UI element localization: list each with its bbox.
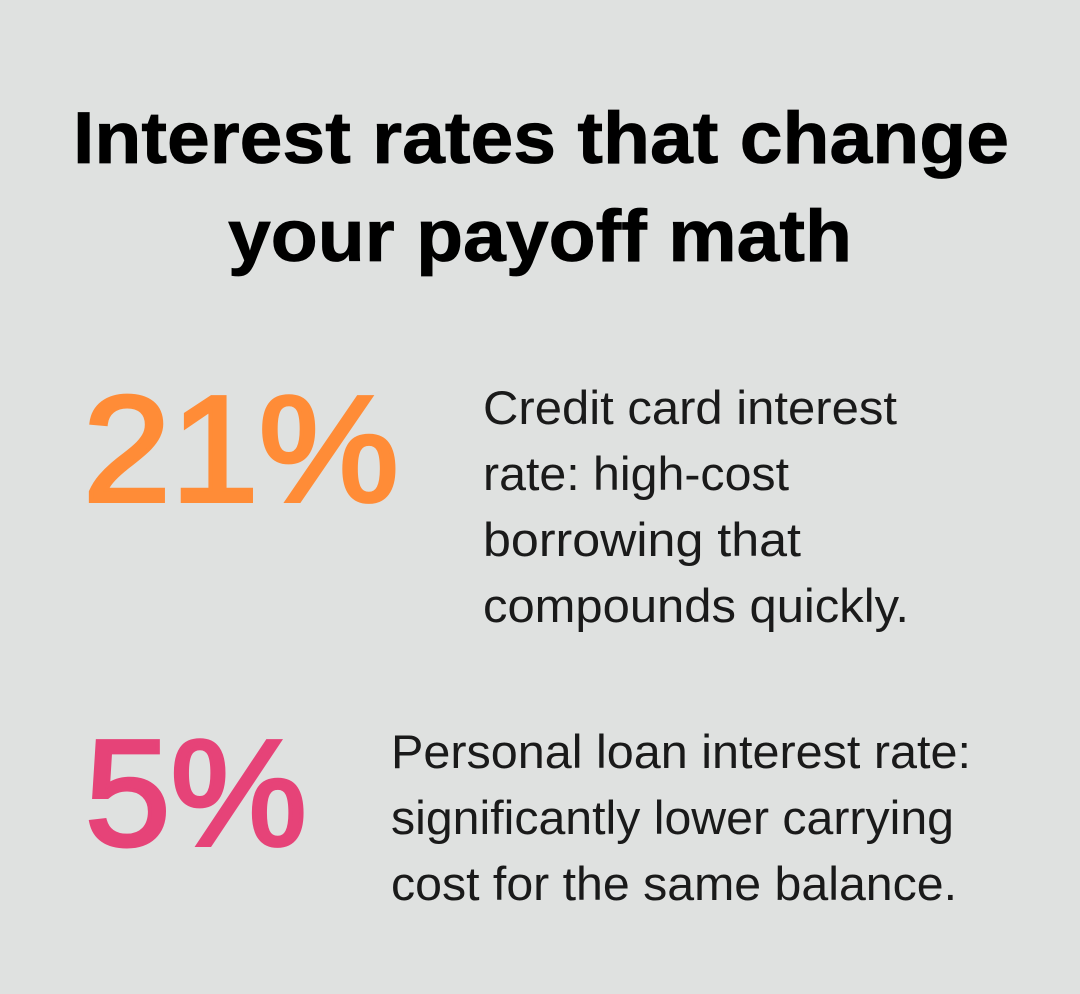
description: credit card interest rate: rate: high-cost [483, 447, 789, 500]
description: credit card interest rate [483, 381, 909, 632]
description: personal loan interest rate [391, 725, 971, 910]
title: Interest rates that change [73, 98, 1009, 179]
description: credit card interest rate: compounds quickly. [483, 579, 909, 632]
title [73, 98, 1009, 277]
number: 21%: 21% [83, 364, 399, 533]
description: personal loan interest rate: significantly lower carrying [391, 791, 954, 844]
number: 5%: 5% [85, 708, 307, 877]
description: personal loan interest rate: cost for the same balance. [391, 857, 957, 910]
description: credit card interest rate: borrowing that [483, 513, 801, 566]
description: credit card interest rate: Credit card interest [483, 381, 897, 434]
title: your payoff math [228, 196, 852, 277]
stat: 5% personal loan [85, 708, 971, 910]
stat: 21% credit card [83, 364, 909, 632]
description: personal loan interest rate: Personal loan interest rate: [391, 725, 971, 778]
